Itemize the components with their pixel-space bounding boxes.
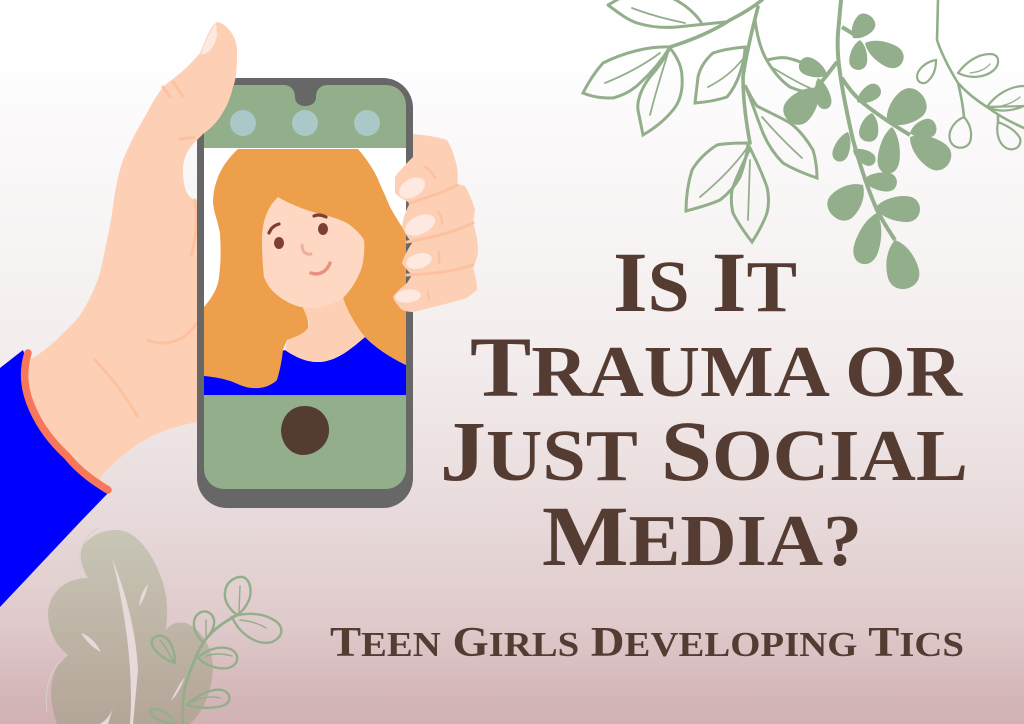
shutter button <box>281 406 329 455</box>
top right filled foliage <box>778 0 957 292</box>
title: IS IT <box>613 234 797 330</box>
title: TRAUMA OR <box>470 319 963 415</box>
selfie neck <box>285 298 365 362</box>
title: MEDIA? <box>542 488 862 584</box>
camera dots <box>230 110 380 136</box>
icon: bracelet <box>25 353 108 490</box>
panel: phone screen <box>204 140 406 400</box>
title: JUST SOCIAL <box>440 403 968 499</box>
selfie face <box>262 197 364 308</box>
selfie shirt <box>204 337 406 395</box>
selfie eyes and brows <box>269 215 330 274</box>
title <box>440 234 968 584</box>
phone bottom bar <box>204 395 406 489</box>
bottom left pale leaves <box>46 528 213 724</box>
icon: fingers <box>393 134 478 312</box>
icon: sleeve <box>0 350 110 607</box>
panel: phone body <box>197 78 413 508</box>
top right outlined foliage <box>583 0 817 242</box>
selfie hair <box>204 149 406 388</box>
thumb over phone <box>185 50 237 140</box>
subtitle: TEEN GIRLS DEVELOPING TICS <box>330 620 964 666</box>
icon: thumb nail <box>201 23 217 54</box>
bottom left outlined sprig <box>150 577 281 724</box>
hand creases <box>95 82 198 417</box>
illustration: hand holding phone <box>0 22 478 607</box>
far right thin foliage <box>917 0 1024 149</box>
phone top bar <box>204 85 406 148</box>
icon: hand and thumb <box>27 22 237 487</box>
